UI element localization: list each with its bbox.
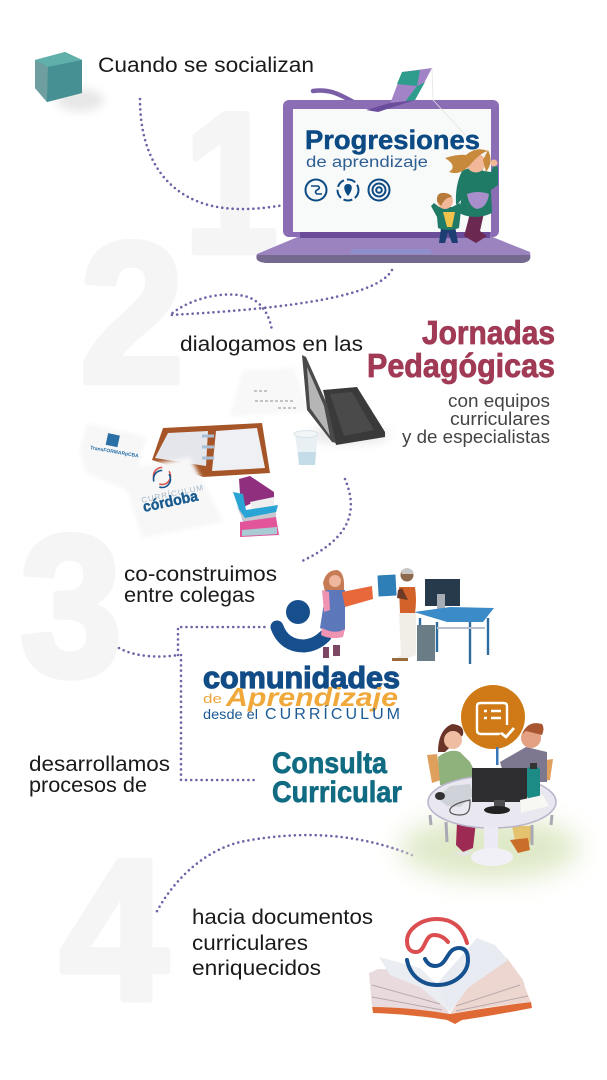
- text: con equipos: curriculares: [450, 408, 550, 429]
- chairs: [427, 754, 441, 783]
- grass: [400, 816, 580, 880]
- heading: consulta curricular: [272, 747, 402, 809]
- notes sheet: [229, 368, 308, 417]
- text: con equipos: y de especialistas: [402, 426, 550, 447]
- text: desarrollamos procesos de: [29, 752, 170, 797]
- text: hacia documentos curriculares enriquecidos: hacia documentos: [192, 905, 373, 929]
- text: dialogamos en las: dialogamos en las: [180, 332, 363, 356]
- left pages: [369, 969, 450, 1014]
- number 4: 4: [60, 819, 168, 1042]
- keyboard and mouse: [437, 784, 474, 807]
- heading: consulta curricular: Curricular: [272, 776, 402, 809]
- man with folder: [377, 568, 416, 661]
- dotted connector 3: [300, 479, 351, 562]
- bottle and paper: [527, 767, 540, 799]
- dotted connector 1: [140, 99, 284, 209]
- subtitle: de aprendizaje: de aprendizaje: [306, 154, 428, 171]
- heading: jornadas pedagogicas: [367, 314, 555, 384]
- right person: [500, 723, 547, 853]
- kite: [366, 68, 490, 160]
- sheet: transformar: TransFORMARpCBA: [90, 445, 139, 460]
- number 3: 3: [20, 495, 122, 718]
- small laptop: [302, 355, 390, 445]
- sheet: curriculum cordoba: CURRÍCULUM: [141, 483, 205, 505]
- number 2: 2: [80, 202, 184, 425]
- logo: comunidades de aprendizaje desde el curriculum: Aprendizaje: [225, 682, 398, 712]
- left person: [438, 724, 476, 856]
- icon: orange checklist badge: [461, 685, 525, 765]
- kite tail: [313, 90, 392, 109]
- dotted connector 5: [155, 835, 412, 915]
- laptop screen: [283, 100, 499, 237]
- text: hacia documentos curriculares enriquecidos: curriculares: [192, 931, 308, 955]
- logo: comunidades de aprendizaje desde el curriculum: [203, 660, 400, 723]
- heading: consulta curricular: Consulta: [272, 747, 387, 780]
- book cover: [372, 1002, 532, 1024]
- illustration: colleagues at desk: [277, 568, 494, 664]
- dotted connector 2: [170, 270, 392, 331]
- water glass: [294, 430, 318, 465]
- sheet: curriculum cordoba: córdoba: [141, 488, 200, 516]
- icons: route, location, target: [306, 180, 390, 200]
- text: co-construimos entre colegas: [124, 562, 277, 607]
- text: cuando se socializan: Cuando se socializan: [98, 53, 314, 77]
- illustration: people around table: [400, 685, 580, 880]
- sheet: curriculum cordoba: [121, 457, 224, 538]
- child: [431, 193, 461, 243]
- text: con equipos: [402, 390, 550, 447]
- monitor: [472, 768, 527, 802]
- heading: jornadas pedagogicas: Jornadas: [422, 314, 555, 351]
- text: hacia documentos curriculares enriquecidos: [192, 905, 373, 980]
- text: con equipos: con equipos: [448, 390, 550, 411]
- text: desarrollamos procesos de: procesos de: [29, 773, 147, 797]
- logo: comunidades de aprendizaje desde el curriculum: CURRÍCULUM: [265, 704, 400, 723]
- illustration: open book with logo: [369, 919, 532, 1024]
- logo smile mark: [277, 600, 325, 646]
- logo: red and blue curves: [407, 919, 468, 985]
- woman with card: [320, 570, 373, 658]
- logo: comunidades de aprendizaje desde el curriculum: de: [203, 691, 222, 706]
- woman with kite string: [445, 149, 498, 243]
- illustration: laptop progresiones: [256, 68, 530, 263]
- text: desarrollamos procesos de: desarrollamos: [29, 752, 170, 776]
- text: co-construimos entre colegas: entre colegas: [124, 583, 255, 607]
- dotted connector 4: [119, 627, 266, 780]
- text: co-construimos entre colegas: co-construimos: [124, 562, 277, 586]
- logo: comunidades de aprendizaje desde el curriculum: desde el: [203, 707, 258, 722]
- computer desk: [414, 579, 494, 664]
- open binder: [152, 423, 270, 477]
- right pages: [450, 958, 531, 1014]
- logo: comunidades de aprendizaje desde el curriculum: comunidades: [203, 660, 400, 695]
- icon: teal cube: [35, 52, 104, 111]
- stack of books: [233, 476, 279, 537]
- title: progresiones: Progresiones: [305, 125, 480, 155]
- number 1: 1: [184, 72, 278, 295]
- text: hacia documentos curriculares enriquecidos: enriquecidos: [192, 956, 321, 980]
- laptop base: [256, 236, 530, 263]
- sheet: transformar: [80, 423, 147, 492]
- heading: jornadas pedagogicas: Pedagógicas: [367, 347, 555, 384]
- illustration: desk with documents: [80, 355, 390, 538]
- table: [428, 776, 556, 828]
